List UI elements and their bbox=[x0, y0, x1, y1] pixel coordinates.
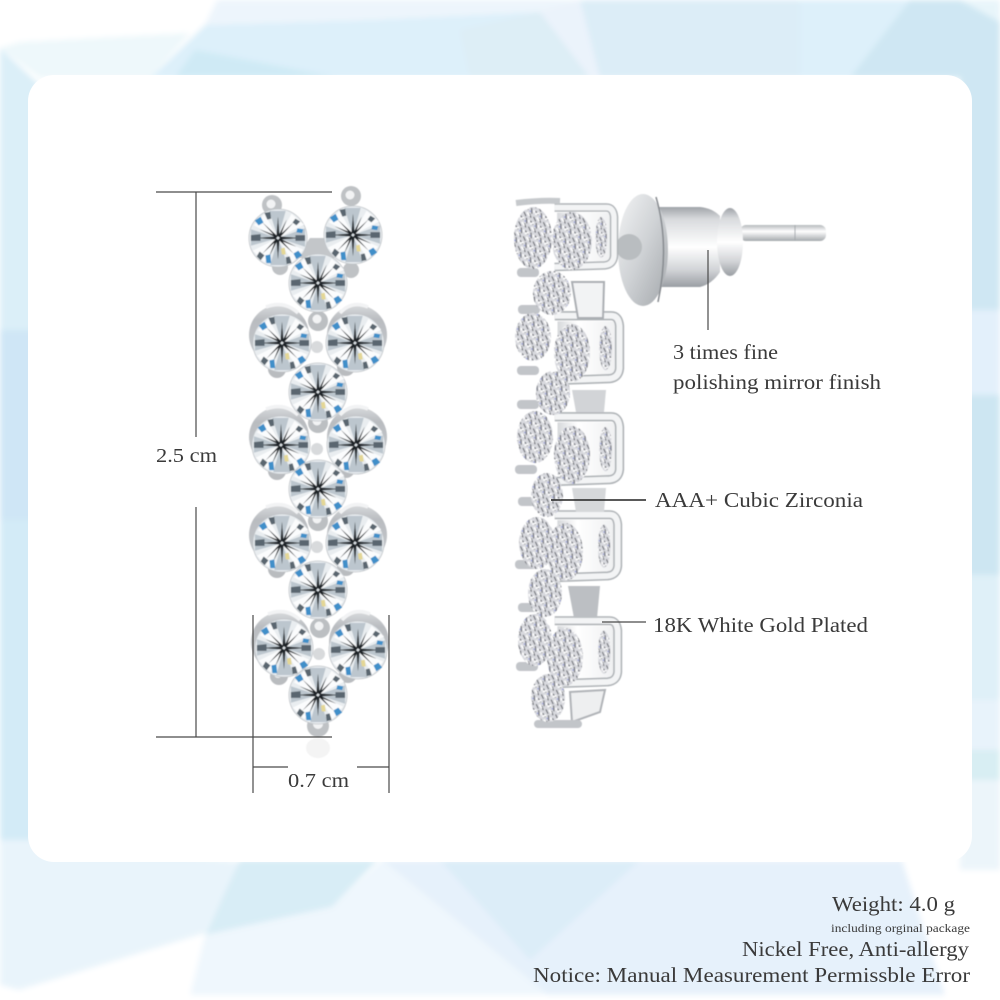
front view earring bbox=[249, 186, 389, 758]
stones, row 4 bbox=[253, 514, 384, 619]
height label: 2.5 cm bbox=[156, 445, 217, 467]
callout: plating: 18K White Gold Plated bbox=[653, 613, 869, 637]
side view earring bbox=[514, 194, 826, 728]
top rail bbox=[516, 201, 560, 203]
reflection under earring bbox=[306, 738, 330, 758]
callout: polish finish bbox=[673, 250, 882, 394]
side prongs bbox=[515, 268, 582, 728]
setting for row 4 bbox=[249, 505, 387, 578]
white content panel bbox=[28, 75, 972, 862]
setting for row 3 bbox=[249, 407, 387, 480]
footer specifications: Notice: Manual Measurement Permissble Error bbox=[533, 963, 970, 987]
stones, row 2 bbox=[253, 314, 384, 421]
setting for row 2 bbox=[249, 305, 387, 378]
height dimension marker bbox=[156, 192, 332, 737]
footer specifications: Nickel Free, Anti-allergy bbox=[742, 937, 970, 961]
earring back post pin bbox=[740, 225, 826, 241]
stones, row 1 bbox=[249, 206, 382, 312]
callout: polish finish: polishing mirror finish bbox=[673, 370, 882, 394]
silver frames bbox=[555, 208, 620, 684]
width label: 0.7 cm bbox=[288, 770, 349, 792]
stones, row 3 bbox=[252, 416, 385, 518]
footer specifications: including orginal package bbox=[831, 923, 970, 935]
footer specifications: Weight: 4.0 g bbox=[832, 892, 956, 916]
footer specifications bbox=[533, 892, 970, 987]
callout: cubic zirconia: AAA+ Cubic Zirconia bbox=[655, 488, 864, 512]
callout: polish finish: 3 times fine bbox=[673, 340, 778, 364]
setting for row 5 bbox=[251, 612, 389, 685]
top prongs and stem bbox=[262, 186, 361, 278]
stones in side view bbox=[514, 207, 592, 722]
connecting links bbox=[568, 282, 606, 722]
earring back clutch bbox=[616, 194, 743, 306]
stones, row 5 bbox=[255, 619, 387, 724]
width dimension marker bbox=[253, 615, 389, 793]
bottom prong bbox=[307, 715, 329, 737]
